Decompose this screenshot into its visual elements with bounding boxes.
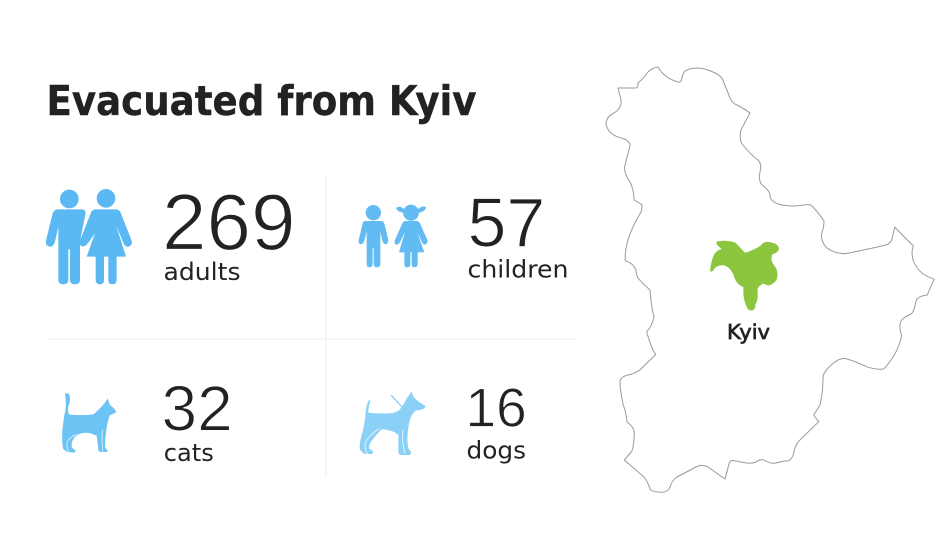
panel: dogs: [360, 376, 527, 464]
panel: adults: [46, 178, 295, 286]
Kyiv city shape: [711, 241, 778, 310]
number: 16: 16: [466, 376, 527, 438]
panel: cats: [62, 372, 233, 467]
panel: children: [359, 184, 568, 284]
label: cats: cats: [164, 439, 214, 467]
label: dogs: dogs: [466, 436, 526, 464]
number: 269: 269: [162, 178, 295, 266]
number: 32: 32: [162, 372, 233, 444]
label: Kyiv: Kyiv: [727, 320, 770, 344]
label: adults: adults: [164, 258, 240, 286]
icon: adults: [46, 189, 132, 284]
label: children: children: [468, 256, 568, 284]
map: Kyiv oblast: [606, 67, 934, 492]
oblast outline: [606, 67, 934, 492]
icon: dog: [360, 392, 426, 455]
number: 57: 57: [468, 184, 545, 262]
title: Evacuated from Kyiv: [46, 77, 477, 125]
icon: cat: [62, 393, 116, 452]
icon: children: [359, 205, 428, 267]
